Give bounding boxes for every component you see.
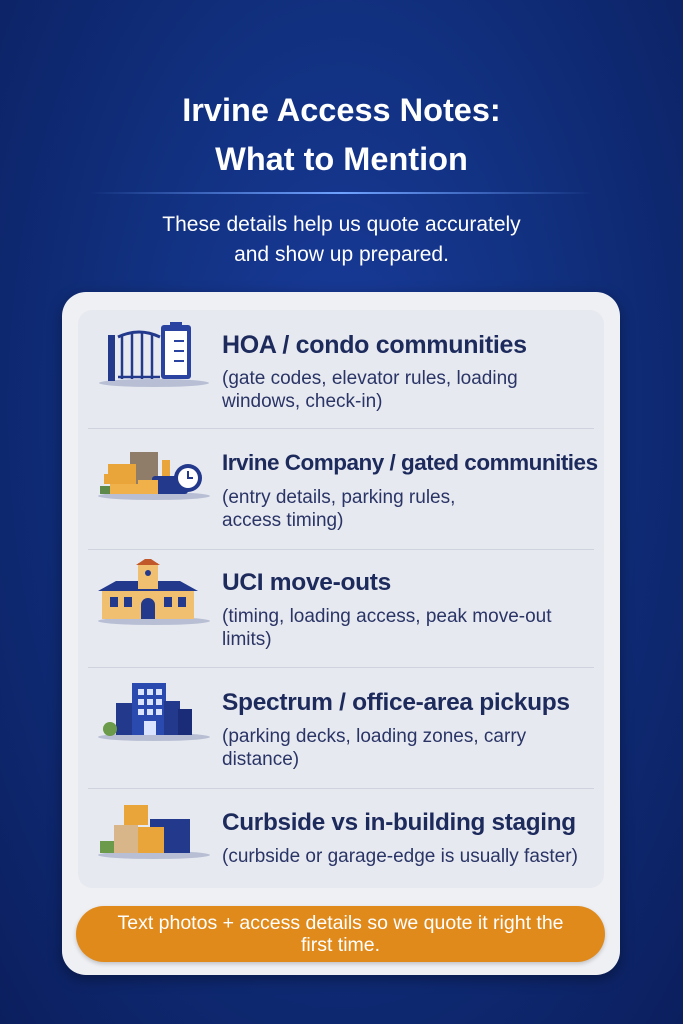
- icon: gate and clipboard: [99, 322, 209, 387]
- row: Irvine Company: (entry details, parking rules, access timing): [222, 487, 455, 531]
- icon: university building: [98, 559, 210, 625]
- row: Irvine Company: [98, 450, 598, 531]
- row: Spectrum: [98, 683, 570, 770]
- icon: boxes at building: [98, 805, 210, 859]
- callout: orange button: Text photos + access details so we quote it right the: [117, 912, 564, 934]
- callout: orange button: [76, 906, 605, 962]
- title: What to Mention: [215, 141, 468, 177]
- subtitle: These details help us quote accurately: [162, 213, 521, 236]
- row: UCI: UCI move-outs: [222, 569, 391, 596]
- row: UCI: (timing, loading access, peak move-out limits): [222, 606, 552, 650]
- panel: card: [62, 292, 620, 975]
- icon: boxes and stopwatch: [98, 452, 210, 500]
- row: Curbside: Curbside vs in-building staging: [222, 809, 576, 836]
- callout: orange button: first time.: [301, 934, 380, 956]
- row: Spectrum: Spectrum / office-area pickups: [222, 689, 570, 716]
- row: HOA: (gate codes, elevator rules, loading windows, check-in): [222, 368, 518, 412]
- row: HOA: HOA / condo communities: [222, 331, 527, 359]
- row: HOA: [99, 322, 527, 412]
- row: Spectrum: (parking decks, loading zones, carry distance): [222, 726, 526, 770]
- subtitle: [162, 213, 521, 266]
- row: UCI: [98, 559, 552, 650]
- title: [182, 92, 501, 177]
- title: Irvine Access Notes:: [182, 92, 501, 128]
- icon: office buildings: [98, 683, 210, 741]
- row: Curbside: [98, 805, 578, 867]
- row: Curbside: (curbside or garage-edge is usually faster): [222, 846, 578, 867]
- row: Irvine Company: Irvine Company / gated communities: [222, 450, 598, 475]
- subtitle: and show up prepared.: [234, 243, 449, 266]
